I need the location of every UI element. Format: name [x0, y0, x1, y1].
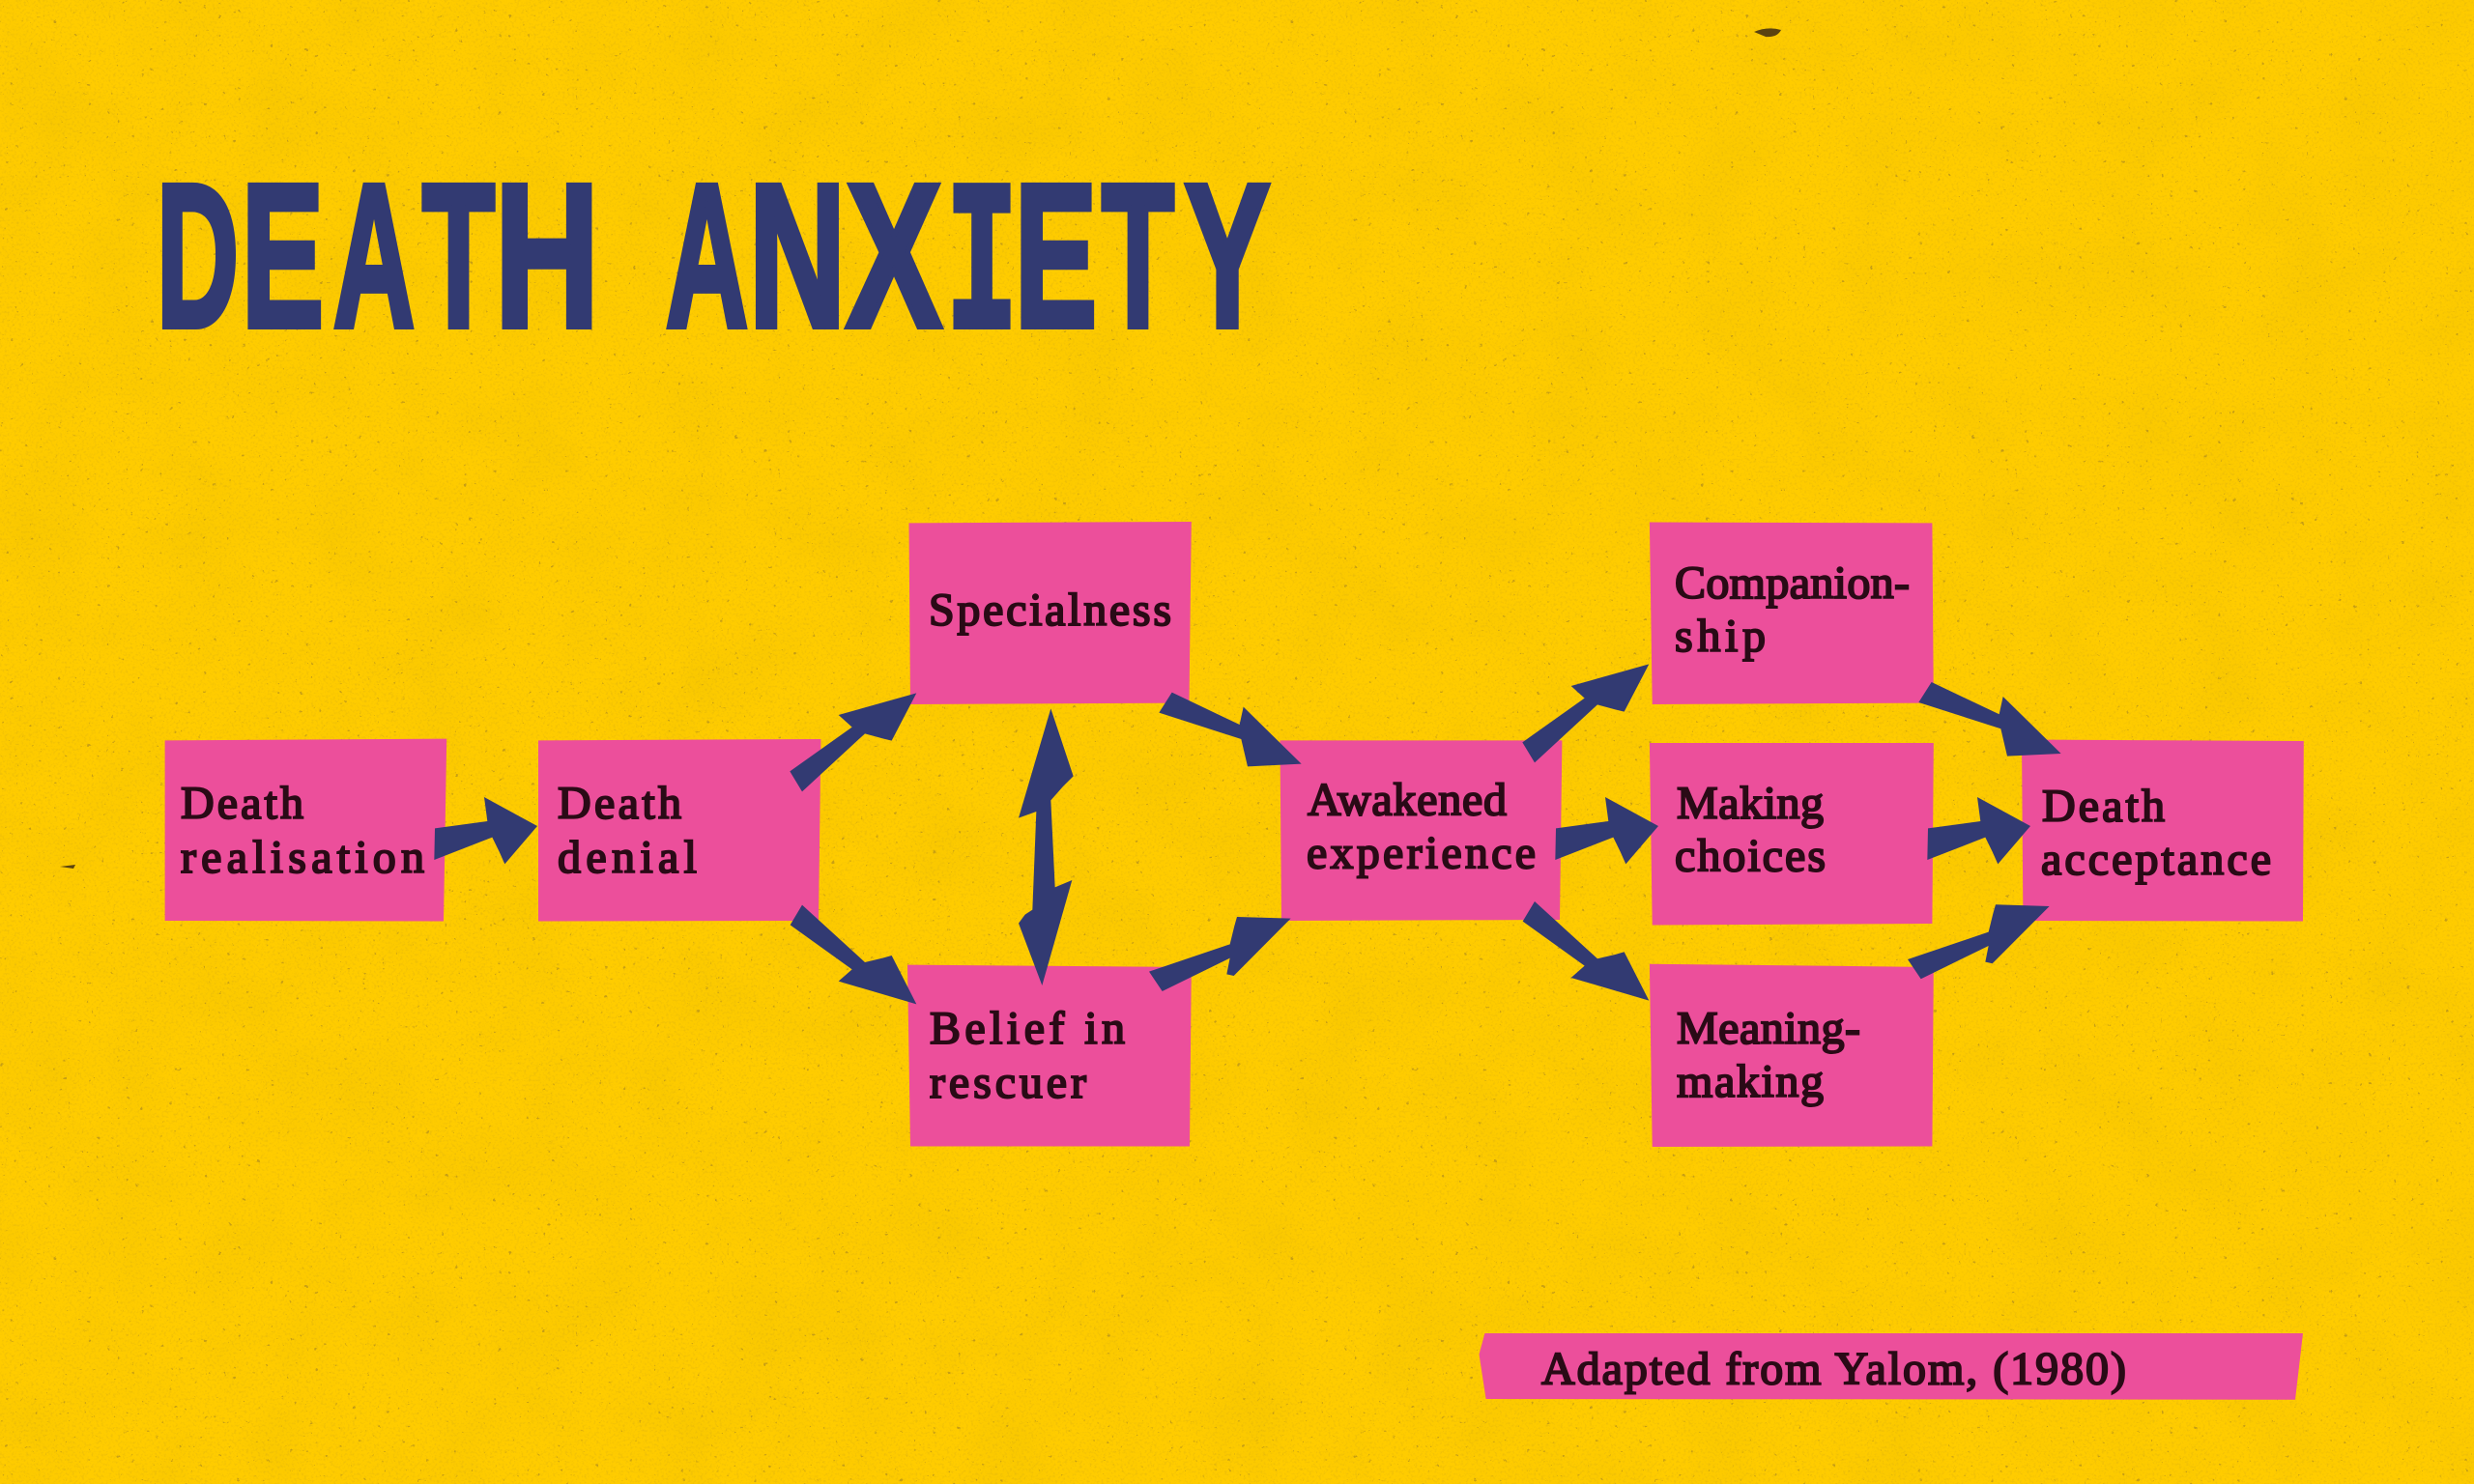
box: Awakened experience — [1280, 740, 1562, 921]
box: Companionship — [1650, 522, 1934, 704]
arrow: double-headed specialness and belief in rescuer — [1019, 708, 1074, 985]
arrow: denial to specialness — [790, 693, 916, 791]
box: Death realisation — [165, 739, 446, 922]
title: I — [946, 151, 1018, 390]
title: E — [242, 141, 324, 369]
arrow: specialness to awakened — [1159, 693, 1302, 766]
arrow: meaning-making to acceptance — [1908, 904, 2050, 979]
citation strip — [1479, 1333, 2303, 1400]
box: Meaning-making: making — [1677, 1056, 1824, 1107]
arrow: awakened to meaning-making — [1523, 901, 1649, 1001]
box: Death acceptance: Death — [2042, 781, 2165, 832]
title: A — [333, 141, 415, 369]
box: Death realisation: Death — [181, 778, 303, 829]
title: N — [749, 141, 846, 369]
box: Companionship: ship — [1675, 611, 1766, 662]
title: T — [1102, 141, 1174, 369]
arrow: making choices to acceptance — [1927, 797, 2030, 864]
box: Belief in rescuer — [907, 965, 1192, 1146]
box: Death denial — [538, 739, 820, 922]
title: Y — [1185, 141, 1270, 369]
title: A — [666, 141, 748, 369]
box: Awakened experience: Awakened — [1308, 775, 1507, 826]
box: Making choices: Making — [1677, 778, 1824, 829]
title — [157, 141, 1270, 390]
arrow: awakened to companionship — [1522, 664, 1649, 762]
title: T — [422, 141, 495, 369]
box: Belief in rescuer: rescuer — [930, 1057, 1086, 1108]
box: Death acceptance — [2022, 740, 2304, 922]
title: D — [157, 141, 239, 369]
box: Specialness — [908, 522, 1192, 704]
arrow: realisation to denial — [434, 797, 537, 864]
box: Specialness: Specialness — [929, 585, 1171, 636]
box: Making choices — [1650, 743, 1934, 926]
title: X — [847, 141, 941, 369]
citation strip: Adapted from Yalom, (1980) — [1541, 1344, 2126, 1395]
title: H — [495, 141, 599, 369]
box: Death acceptance: acceptance — [2041, 834, 2271, 885]
box: Meaning-making: Meaning- — [1677, 1003, 1860, 1054]
title: E — [1015, 141, 1097, 369]
box: Making choices: choices — [1675, 831, 1826, 882]
box: Death denial: Death — [558, 778, 681, 829]
arrow: companionship to acceptance — [1918, 682, 2061, 756]
box: Death denial: denial — [558, 832, 697, 883]
arrow: denial to belief in rescuer — [791, 905, 916, 1004]
box: Meaning-making — [1650, 964, 1934, 1147]
box: Death realisation: realisation — [181, 832, 424, 883]
box: Belief in rescuer: Belief in — [930, 1003, 1125, 1054]
arrow: awakened to making choices — [1555, 797, 1658, 864]
box: Awakened experience: experience — [1307, 828, 1536, 879]
arrow: belief in rescuer to awakened — [1149, 917, 1291, 991]
box: Companionship: Companion- — [1675, 557, 1910, 609]
